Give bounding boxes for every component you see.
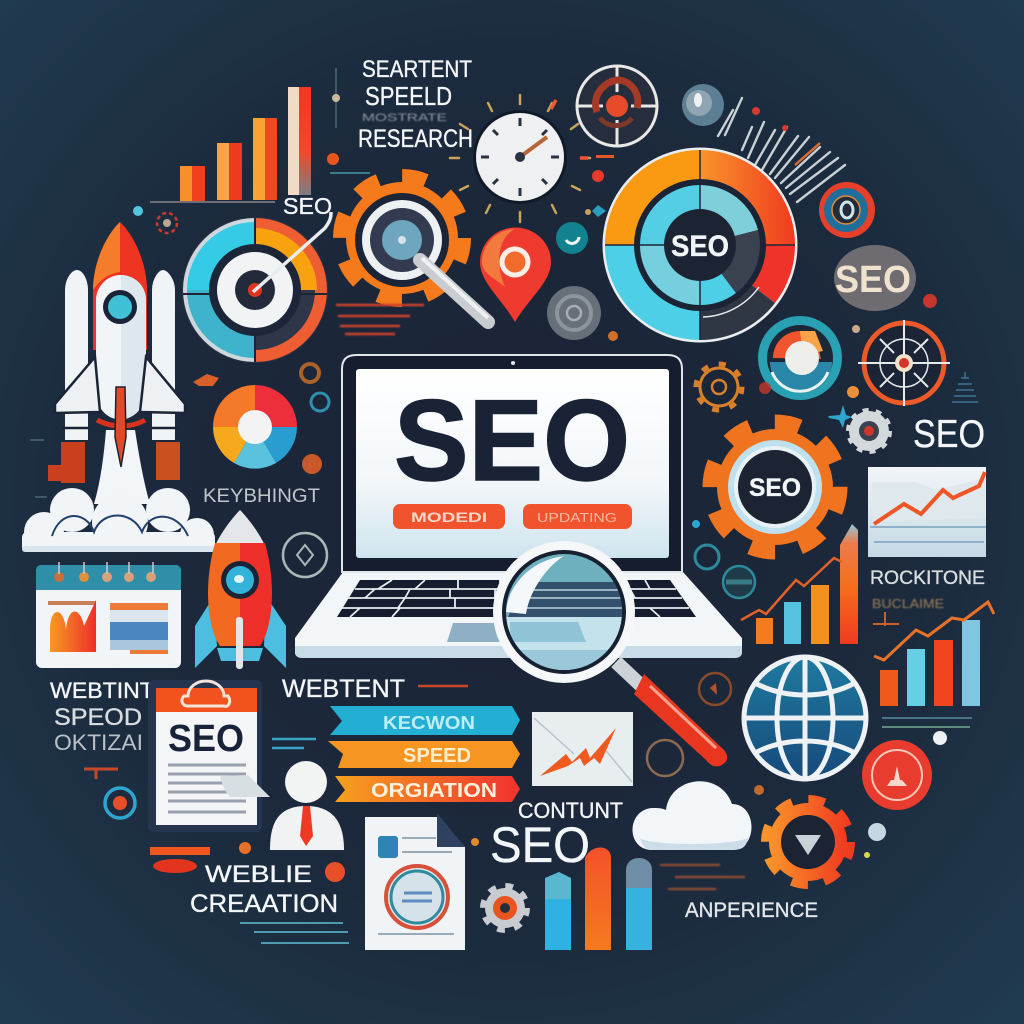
icon: small tower: [952, 372, 978, 402]
laptop screen: [342, 355, 682, 572]
icon: person: [270, 761, 344, 850]
text: webtint speed label: [50, 678, 154, 755]
button right: UPDATING: [537, 510, 617, 525]
icon: large SEO gear: [710, 422, 840, 552]
chart: color pie: [213, 385, 297, 469]
label: target SEO: SEO: [283, 193, 332, 219]
chart: right bars with trend line: [874, 602, 994, 727]
icon: donut badge: [758, 316, 842, 400]
label: donut SEO: SEO: [671, 230, 729, 263]
icon: outline gear: [696, 364, 742, 410]
icon: launch rocket: [22, 222, 215, 552]
text: website creation label: CREAATION: [190, 890, 338, 918]
text: content SEO: [490, 798, 623, 873]
button right: [523, 504, 632, 529]
icon: SEO clipboard: SEO: [168, 718, 244, 760]
icon: SEO bubble: [834, 245, 916, 311]
icon: grey swirl: [547, 286, 601, 340]
icon: envelope chart: [532, 712, 633, 786]
icon: document: [365, 813, 465, 950]
heading: top keyword text: MOSTRATE: [362, 112, 447, 124]
icon: small ring left: [84, 769, 135, 818]
chart: middle bars with trend line: [741, 524, 858, 644]
booster left: [65, 270, 88, 440]
screen SEO title: SEO: [394, 377, 630, 505]
icon: big magnifying glass: [493, 541, 727, 766]
keyboard: [337, 580, 696, 617]
icon: small rocket: [195, 510, 286, 669]
text: keyword label: KEYBHINGT: [203, 486, 320, 507]
ribbon list: [272, 706, 520, 802]
text: experience label: [660, 865, 818, 922]
heading: top keyword text: [358, 56, 473, 153]
text: rocketone label: [870, 568, 985, 626]
ribbon: organisation: ORGIATION: [371, 780, 497, 802]
ribbon: speed: SPEED: [403, 745, 471, 767]
icon: magnifier gear: [340, 176, 488, 322]
button left: MODEDI: [411, 509, 487, 525]
icon: calendar card: [36, 562, 181, 668]
icon: location pin: [480, 228, 551, 322]
rocket plume: [94, 430, 150, 504]
icon: red badge: [862, 740, 932, 810]
chart card: trend line: [868, 467, 986, 557]
text: webtent label: WEBTENT: [282, 675, 405, 703]
icon: orange target: [858, 320, 950, 406]
icon: cloud: [632, 781, 752, 850]
heading: top keyword text: SEARTENT: [362, 56, 472, 83]
chart: top-left rising bars: [150, 87, 311, 203]
text: content SEO: CONTUNT: [518, 798, 623, 823]
chart: large SEO donut: [602, 148, 798, 342]
text: rocketone label: BUCLAIME: [872, 596, 944, 611]
icon: target with arrow: [182, 193, 332, 363]
booster right: [152, 270, 175, 440]
booster flames: [48, 442, 180, 483]
icon: small gear near bars: [483, 886, 527, 930]
icon: SEO bubble: SEO: [835, 259, 911, 301]
heading: top keyword text: SPEELD: [365, 81, 452, 111]
icon: globe: [744, 657, 866, 779]
icon: small silver gear with SEO label: SEO: [913, 413, 985, 456]
icon: orange check gear: [766, 800, 850, 884]
icon: speed clock: [450, 95, 590, 222]
text: website creation label: WEBLIE: [205, 861, 312, 888]
icon: small silver gear with SEO label: [848, 410, 985, 456]
ribbon: keyword: [330, 706, 520, 735]
decorative specks: [30, 68, 947, 858]
icon: SEO clipboard: [148, 680, 270, 832]
ribbon: organisation: [335, 776, 520, 802]
icon: decorative small ring icons: [647, 545, 755, 776]
heading: top keyword text: RESEARCH: [358, 125, 473, 153]
icon: glass orb: [682, 84, 724, 126]
rocket clouds: [22, 488, 215, 552]
text: webtint speed label: OKTIZAI: [54, 730, 143, 755]
icon: teal blob: [556, 222, 588, 254]
text: webtint speed label: WEBTINT: [50, 678, 154, 703]
ribbon: speed: [328, 741, 520, 768]
ribbon: keyword: KECWON: [383, 713, 475, 733]
laptop: [295, 355, 742, 658]
text: content SEO: SEO: [490, 817, 590, 873]
icon: swirl circle: [819, 182, 875, 238]
decorative rays: [718, 98, 845, 202]
text: rocketone label: ROCKITONE: [870, 568, 985, 589]
chart: bottom bars: [545, 848, 652, 950]
text: website creation label: [150, 842, 349, 943]
button left: [393, 504, 505, 529]
text: experience label: ANPERIENCE: [685, 899, 818, 922]
text: webtint speed label: SPEOD: [54, 704, 142, 731]
icon: crosshair circle: [577, 66, 657, 146]
laptop base: [295, 572, 742, 658]
icon: large SEO gear: SEO: [749, 474, 801, 502]
